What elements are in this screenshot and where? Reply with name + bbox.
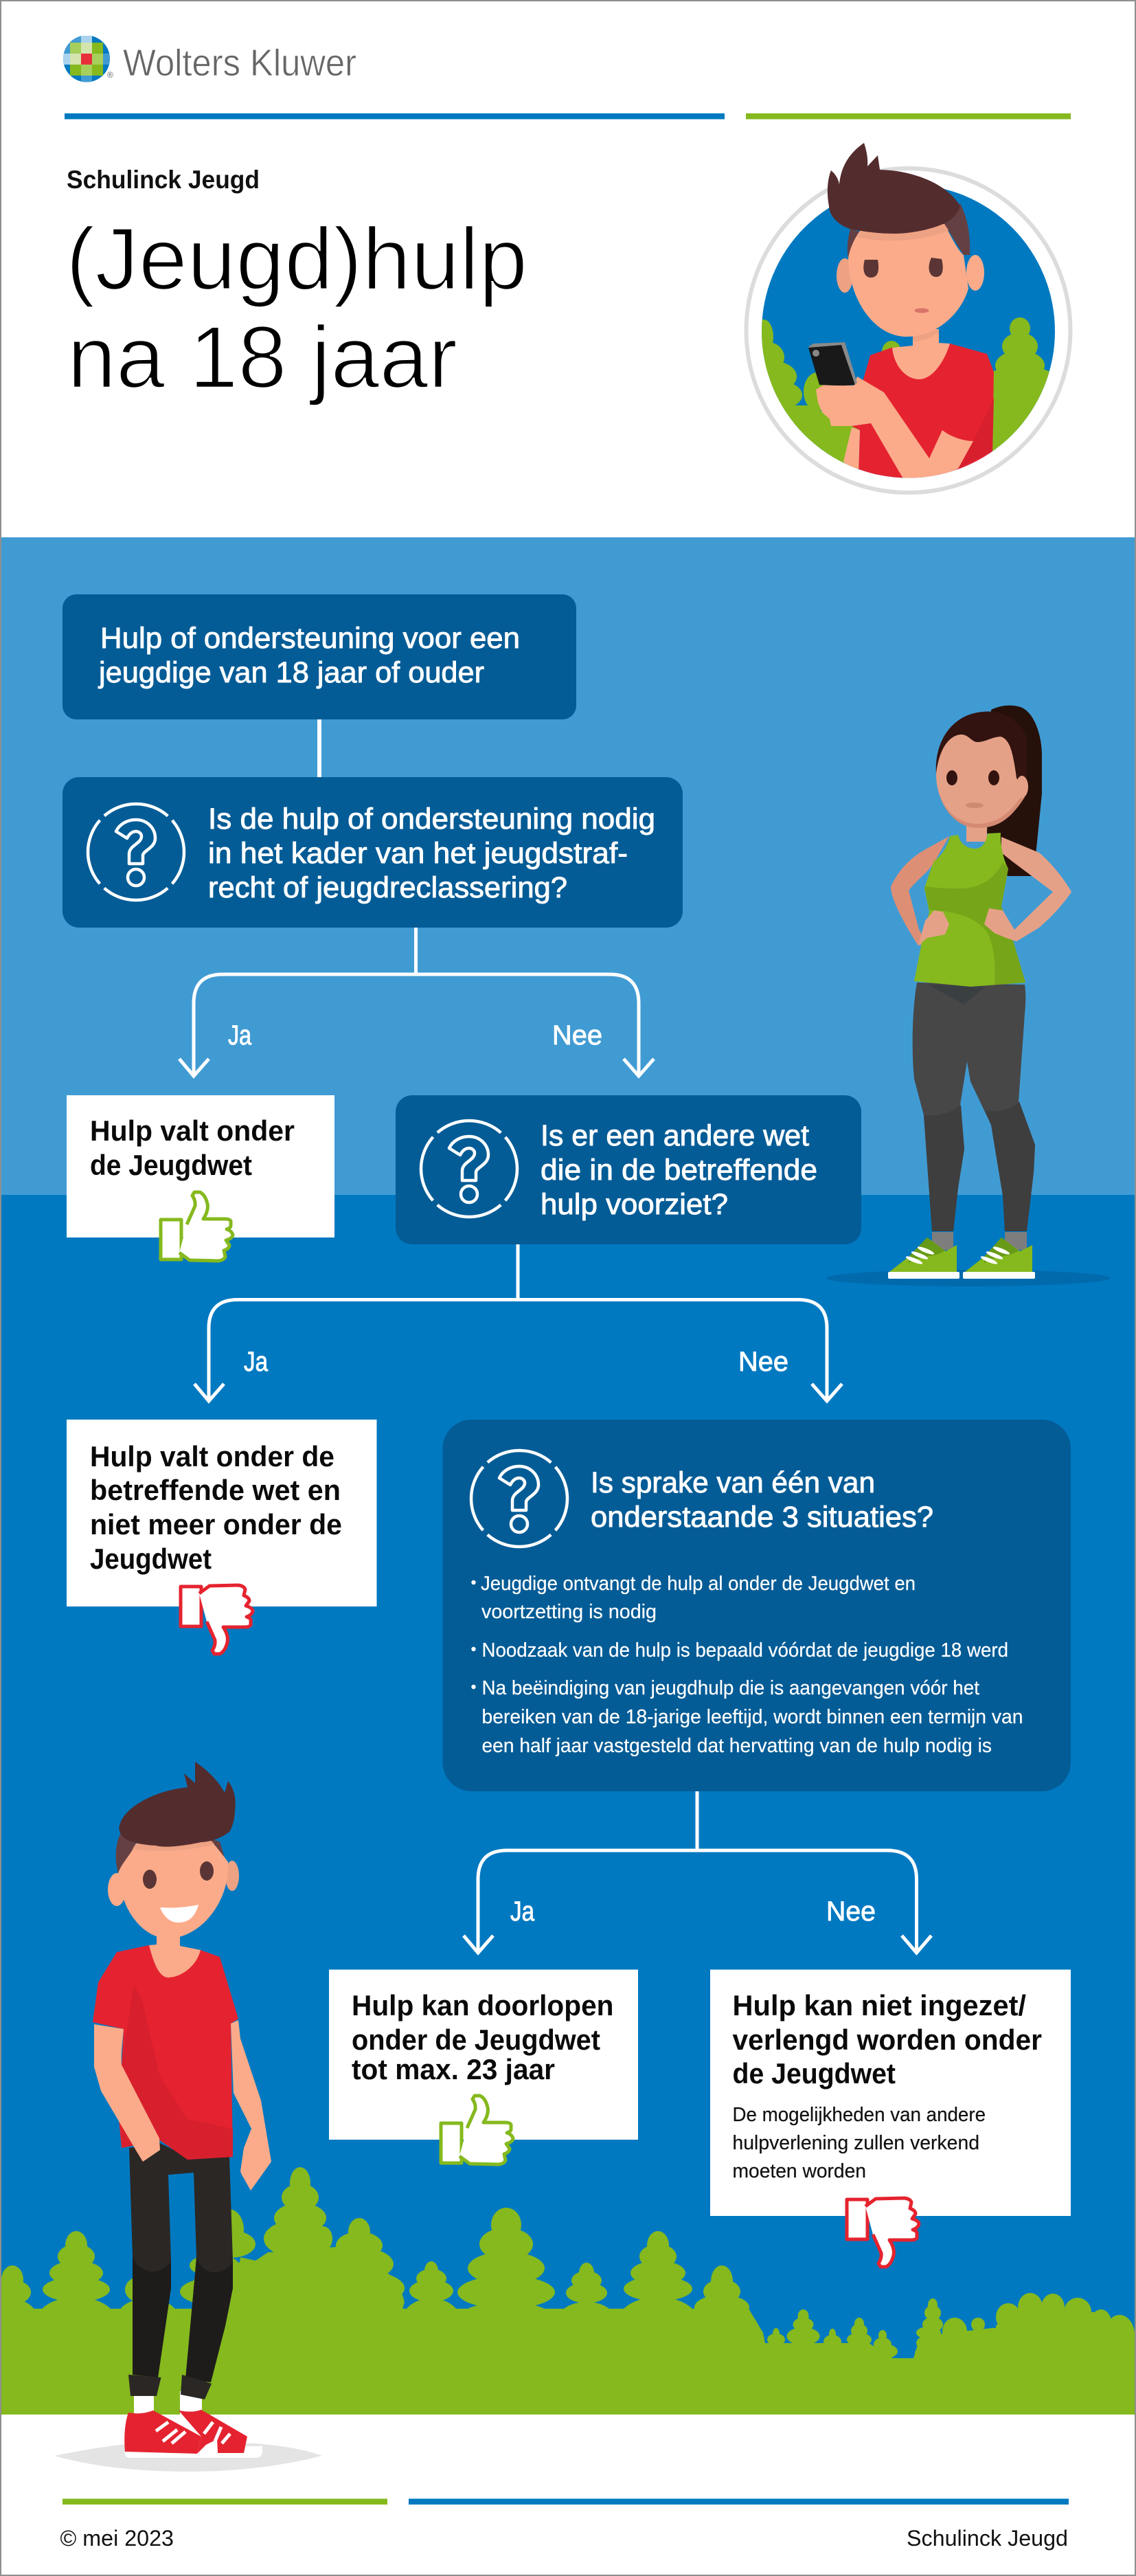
arrows: Ja / Nee after question 2 bbox=[194, 1244, 842, 1401]
panel: start box bbox=[63, 594, 576, 719]
panel: outcome andere wet: niet meer onder de bbox=[90, 1508, 342, 1541]
panel: outcome andere wet: betreffende wet en bbox=[90, 1474, 341, 1506]
arrows: Ja / Nee after question 2: Nee bbox=[738, 1347, 788, 1377]
panel: outcome doorlopen: Hulp kan doorlopen bbox=[352, 1989, 614, 2021]
list of three situations: voortzetting is nodig bbox=[481, 1601, 657, 1623]
arrows: Ja / Nee after question 1 bbox=[179, 928, 654, 1076]
icon: thumbs down bbox=[847, 2198, 919, 2267]
arrows: Ja / Nee after question 3 bbox=[464, 1791, 931, 1953]
boy character bbox=[54, 1762, 322, 2472]
title: (Jeugd)hulp bbox=[66, 210, 527, 309]
list of three situations: Jeugdige ontvangt de hulp al onder de Jeugdwet en bbox=[481, 1573, 916, 1595]
connector: start to question 1 bbox=[317, 719, 321, 777]
panel: outcome Jeugdwet: Hulp valt onder bbox=[90, 1115, 295, 1147]
panel: outcome andere wet: Hulp valt onder de bbox=[90, 1440, 334, 1472]
panel: outcome andere wet bbox=[67, 1420, 376, 1606]
arrows: Ja / Nee after question 2: Ja bbox=[244, 1347, 269, 1377]
arrows: Ja / Nee after question 3: Nee bbox=[826, 1896, 876, 1927]
panel: question 1: in het kader van het jeugdstraf- bbox=[208, 837, 628, 870]
list of three situations: een half jaar vastgesteld dat hervatting van de hulp nodig is bbox=[482, 1735, 992, 1757]
panel: question 3 with situations bbox=[442, 1420, 1071, 1791]
footer brand: Schulinck Jeugd bbox=[907, 2526, 1068, 2551]
list of three situations: bereiken van de 18-jarige leeftijd, wordt binnen een termijn van bbox=[482, 1706, 1023, 1728]
panel: outcome niet ingezet: de Jeugdwet bbox=[732, 2057, 896, 2090]
list of three situations: Na beëindiging van jeugdhulp die is aangevangen vóór het bbox=[482, 1677, 979, 1699]
icon: thumbs down bbox=[181, 1585, 253, 1654]
panel: outcome niet ingezet bbox=[710, 1969, 1071, 2216]
panel: outcome andere wet: Jeugdwet bbox=[90, 1543, 212, 1575]
icon: question mark bbox=[471, 1451, 567, 1547]
icon: thumbs up bbox=[161, 1192, 233, 1261]
top divider bars bbox=[65, 113, 1071, 120]
list of three situations bbox=[471, 1573, 1023, 1757]
panel: question 3 with situations: Is sprake van één van bbox=[591, 1466, 875, 1499]
panel: outcome niet ingezet: hulpverlening zullen verkend bbox=[732, 2132, 979, 2154]
logo: Wolters Kluwer bbox=[63, 36, 356, 84]
footer bars bbox=[63, 2498, 1069, 2505]
panel: start box: jeugdige van 18 jaar of ouder bbox=[98, 656, 484, 689]
brand label: Schulinck Jeugd bbox=[67, 166, 260, 194]
panel: question 1 bbox=[63, 777, 683, 928]
panel: outcome niet ingezet: De mogelijkheden van andere bbox=[732, 2104, 986, 2126]
panel: question 2: die in de betreffende bbox=[541, 1154, 817, 1187]
panel: outcome doorlopen: onder de Jeugdwet bbox=[352, 2024, 600, 2056]
panel: outcome niet ingezet: verlengd worden onder bbox=[732, 2024, 1042, 2056]
avatar: boy with phone in circle bbox=[746, 143, 1070, 493]
icon: question mark bbox=[421, 1121, 517, 1217]
list of three situations: Noodzaak van de hulp is bepaald vóórdat de jeugdige 18 werd bbox=[482, 1639, 1008, 1661]
woman character bbox=[826, 706, 1111, 1286]
panel: question 1: Is de hulp of ondersteuning nodig bbox=[208, 803, 655, 836]
trees silhouette bbox=[0, 2167, 1136, 2415]
footer date: © mei 2023 bbox=[60, 2526, 174, 2551]
panel: question 3 with situations: onderstaande 3 situaties? bbox=[591, 1501, 933, 1534]
title bbox=[66, 210, 527, 407]
panel: outcome Jeugdwet bbox=[67, 1095, 334, 1237]
panel: outcome Jeugdwet: de Jeugdwet bbox=[90, 1149, 252, 1181]
panel: start box: Hulp of ondersteuning voor een bbox=[100, 622, 520, 655]
panel: flowchart background bbox=[0, 537, 1136, 2415]
panel: question 1: recht of jeugdreclassering? bbox=[208, 871, 567, 904]
arrows: Ja / Nee after question 1: Ja bbox=[228, 1020, 252, 1051]
panel: question 2: hulp voorziet? bbox=[541, 1188, 728, 1221]
panel: outcome niet ingezet: Hulp kan niet ingezet/ bbox=[732, 1989, 1026, 2021]
title: na 18 jaar bbox=[67, 309, 457, 407]
panel: outcome doorlopen: tot max. 23 jaar bbox=[352, 2053, 555, 2085]
panel: question 2: Is er een andere wet bbox=[541, 1119, 809, 1152]
icon: thumbs up bbox=[441, 2096, 513, 2164]
panel: outcome niet ingezet: moeten worden bbox=[732, 2160, 866, 2182]
panel: outcome doorlopen bbox=[329, 1969, 638, 2140]
icon: question mark bbox=[88, 804, 184, 900]
logo: Wolters Kluwer: ® bbox=[107, 70, 113, 80]
panel: question 2 bbox=[396, 1095, 861, 1244]
arrows: Ja / Nee after question 3: Ja bbox=[510, 1896, 535, 1927]
logo: Wolters Kluwer: Wolters Kluwer bbox=[123, 41, 356, 84]
arrows: Ja / Nee after question 1: Nee bbox=[552, 1020, 602, 1051]
